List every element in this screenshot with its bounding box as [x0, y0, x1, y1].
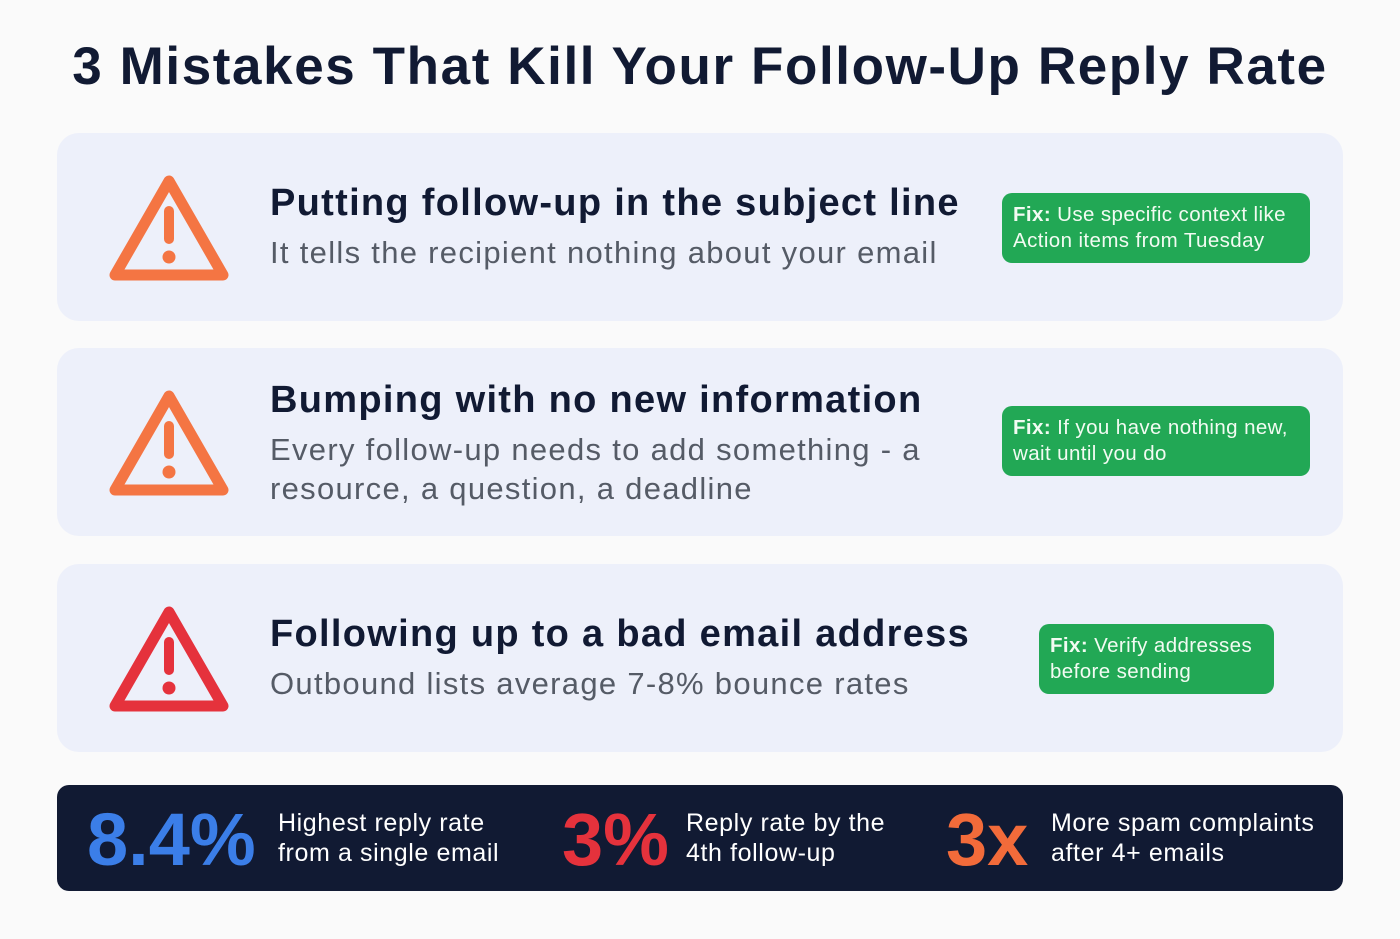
callout: fix: Action items from Tuesday: [1013, 229, 1265, 252]
stats bar: [57, 785, 1343, 891]
callout: fix: [1002, 193, 1310, 263]
icon: warning triangle red: [110, 606, 228, 712]
icon: warning triangle orange: [110, 390, 228, 496]
text block: It tells the recipient nothing about your email: [270, 235, 938, 270]
callout: fix: Fix: If you have nothing new,: [1013, 416, 1288, 439]
stat: 3x: [946, 798, 1314, 881]
callout: fix: [1002, 406, 1310, 476]
icon: warning triangle orange: [110, 176, 228, 280]
callout: fix: before sending: [1050, 660, 1191, 683]
stat: 3%: Reply rate by the: [686, 809, 885, 837]
panel: mistake 1: [57, 133, 1343, 321]
stat: 8.4%: [87, 798, 499, 881]
heading: Bumping with no new information: [270, 379, 922, 421]
heading: Putting follow-up in the subject line: [270, 182, 960, 224]
stat: 3%: 3%: [562, 798, 669, 881]
title: 3 Mistakes That Kill Your Follow-Up Reply Rate: [72, 37, 1328, 96]
stat: 3x: 3x: [946, 798, 1028, 881]
text block: Every follow-up needs to add something - a: [270, 432, 921, 467]
callout: fix: Fix: Verify addresses: [1050, 634, 1252, 657]
stat: 3x: More spam complaints: [1051, 809, 1314, 837]
stat: 3x: after 4+ emails: [1051, 839, 1225, 867]
stat: 3%: [562, 798, 885, 881]
stat: 8.4%: from a single email: [278, 839, 499, 867]
text block: [270, 432, 921, 506]
stat: 8.4%: Highest reply rate: [278, 809, 485, 837]
heading: Following up to a bad email address: [270, 613, 970, 655]
text block: resource, a question, a deadline: [270, 471, 753, 506]
callout: fix: wait until you do: [1013, 442, 1167, 465]
stat: 8.4%: 8.4%: [87, 798, 256, 881]
panel: mistake 2: [57, 348, 1343, 536]
panel: mistake 3: [57, 564, 1343, 752]
text block: Outbound lists average 7-8% bounce rates: [270, 666, 910, 701]
stat: 3%: 4th follow-up: [686, 839, 836, 867]
callout: fix: [1039, 624, 1274, 694]
callout: fix: Fix: Use specific context like: [1013, 203, 1286, 226]
